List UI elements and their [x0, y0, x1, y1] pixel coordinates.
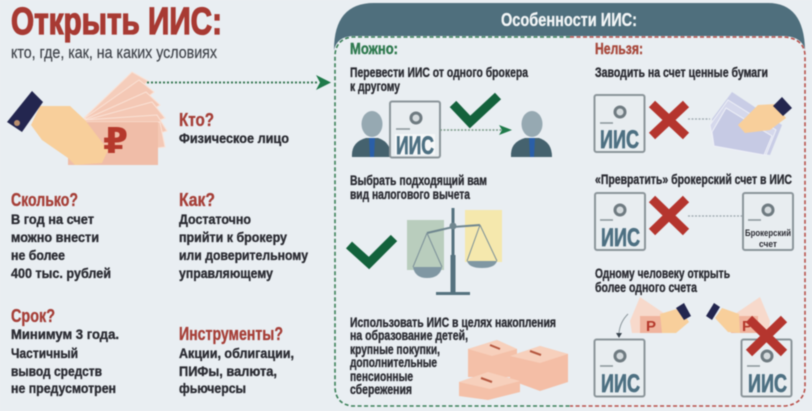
icon: cross 2 [652, 199, 686, 232]
text block: how much: Сколько? [11, 190, 78, 210]
icon: hand holding money [7, 72, 167, 165]
text block: how: управляющему [179, 265, 273, 281]
arrow: transfer [440, 125, 512, 135]
text: savings: крупные покупки, [350, 341, 440, 357]
text block: who: Физическое лицо [179, 130, 289, 146]
dotted link 2 [688, 215, 743, 217]
icon: check mark 2 [349, 238, 394, 263]
text: one account [595, 265, 730, 295]
icon: right hand with money [706, 297, 770, 335]
title: Открыть ИИС: [11, 1, 222, 43]
text: savings: пенсионные [350, 368, 413, 384]
text block: instruments: Инструменты? [179, 324, 283, 344]
text block: how: Достаточно [179, 211, 251, 227]
subtitle: кто, где, как, на каких условиях [11, 43, 217, 62]
panel: features [334, 3, 805, 406]
text: transfer [350, 64, 528, 94]
icon: safe 4 [594, 340, 644, 398]
text: one account: Одному человеку открыть [595, 265, 730, 281]
heading: forbidden: Нельзя: [595, 41, 643, 58]
icon: safe 2: ИИС [600, 126, 639, 154]
icon: safe 3 [595, 193, 645, 252]
icon: broker account safe: счет [759, 239, 778, 249]
dashed border: forbidden side [570, 37, 805, 406]
panel header [334, 3, 805, 50]
icon: left hand with money [630, 297, 691, 335]
text block: instruments: фьючерсы [179, 380, 246, 396]
arrow: to panel [147, 75, 331, 90]
header title: Особенности ИИС: [501, 10, 637, 30]
icon: person right [511, 111, 552, 157]
icon: cross 3 [749, 319, 784, 353]
icon: safe 5 [742, 340, 792, 398]
icon: hand holding money: ₽ [103, 120, 128, 161]
icon: stacks of money [459, 340, 568, 400]
text block: how much: можно внести [11, 229, 99, 245]
text: savings: на образование детей, [350, 327, 468, 343]
dotted link 1 [688, 118, 710, 120]
dashed border: allowed side [335, 37, 570, 406]
text block: term: Частичный [11, 345, 78, 361]
icon: safe 4: ИИС [601, 370, 640, 398]
icon: broker account safe: Брокерский [745, 228, 791, 238]
text: tax deduction: Выбрать подходящий вам [350, 172, 487, 188]
text block: instruments: Акции, облигации, [179, 345, 294, 361]
text: tax deduction [350, 172, 487, 202]
text block: term: не предусмотрен [11, 380, 116, 396]
icon: person left [352, 111, 391, 157]
text block: how: или доверительному [179, 247, 308, 263]
text block: term: Минимум 3 года. [11, 326, 119, 342]
text: savings [350, 314, 556, 397]
text: transfer: Перевести ИИС от одного брокера [350, 64, 528, 80]
text block: how much [11, 190, 111, 281]
text: savings: сбережения [350, 381, 412, 397]
text block: term: Срок? [11, 306, 55, 326]
text block: how much: В год на счет [11, 211, 94, 227]
text: savings: дополнительные [350, 354, 437, 370]
icon: safe 1: ИИС [396, 132, 434, 160]
text block: how: прийти к брокеру [179, 229, 287, 245]
icon: safe 1 [390, 102, 440, 160]
text block: instruments [179, 324, 294, 396]
icon: safe 3: ИИС [601, 224, 640, 252]
text block: who [179, 110, 289, 146]
text: savings: Использовать ИИС в целях накопления [350, 314, 556, 330]
text: tax deduction: вид налогового вычета [350, 186, 470, 202]
text block: how much: 400 тыс. рублей [11, 265, 111, 281]
icon: securities in hand [710, 92, 792, 155]
icon: scales with documents [407, 208, 502, 295]
icon: left hand with money: Р [646, 318, 656, 335]
icon: check mark 1 [453, 96, 498, 122]
text block: term: вывод средств [11, 363, 102, 379]
heading: allowed: Можно: [350, 41, 398, 58]
icon: right hand with money: Р [742, 318, 752, 335]
text block: how: Как? [179, 190, 215, 210]
text: transfer: к другому [350, 78, 400, 94]
text block: instruments: ПИФы, валюта, [179, 363, 277, 379]
icon: safe 2 [594, 95, 644, 154]
text block: who: Кто? [179, 110, 214, 130]
icon: cross 1 [652, 104, 686, 136]
text block: term [11, 306, 119, 396]
icon: safe 5: ИИС [748, 370, 787, 398]
arrow: money into safe [616, 314, 628, 338]
text block: how much: не более [11, 247, 65, 263]
icon: broker account safe [743, 193, 793, 250]
text: one account: более одного счета [595, 279, 697, 295]
text block: how [179, 190, 308, 281]
